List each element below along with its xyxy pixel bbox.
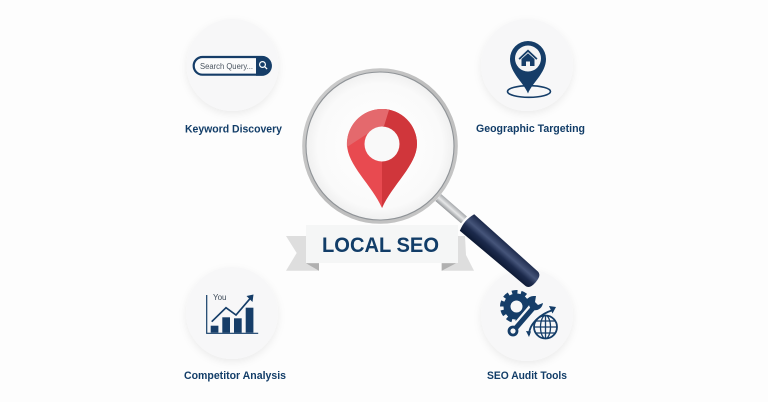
competitor circle (186, 267, 278, 359)
keyword label: Keyword Discovery (185, 124, 283, 136)
icon: gear, wrench and globe (502, 292, 557, 338)
panel: competitor analysis (184, 267, 286, 382)
audit label: SEO Audit Tools (487, 370, 567, 382)
banner title: LOCAL SEO (322, 234, 439, 257)
audit circle (481, 269, 573, 361)
keyword circle (186, 19, 278, 111)
glass handle (431, 189, 543, 291)
geographic label: Geographic Targeting (476, 123, 585, 135)
panel: keyword discovery (185, 19, 283, 136)
magnifying glass (304, 70, 543, 291)
banner tails (286, 236, 319, 271)
geographic circle (481, 19, 573, 111)
panel: seo audit tools (481, 269, 573, 382)
banner (286, 225, 474, 271)
competitor label: Competitor Analysis (184, 370, 286, 382)
icon: search bar: Search Query... (200, 61, 253, 71)
icon: home location pin (508, 41, 550, 97)
glass lens (304, 70, 456, 222)
red location pin (347, 109, 417, 208)
panel: geographic targeting (476, 19, 585, 135)
banner ribbon (306, 225, 458, 263)
icon: growth chart: You (213, 293, 226, 302)
